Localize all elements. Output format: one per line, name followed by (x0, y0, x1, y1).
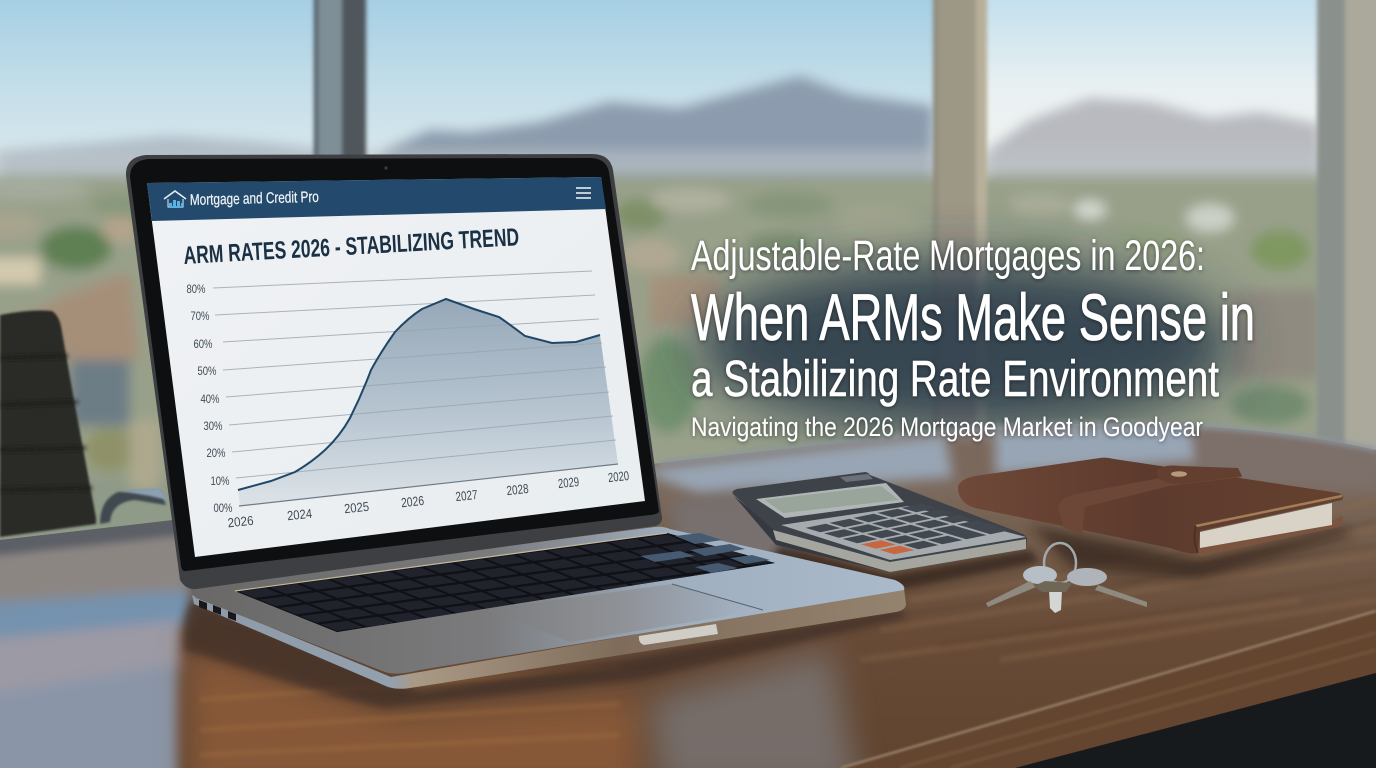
desk (0, 418, 1376, 768)
front latch (639, 624, 718, 645)
calculator shadow (770, 545, 1040, 592)
notebook shadow (1030, 525, 1350, 578)
x axis labels: 2027 (455, 487, 478, 504)
y axis labels: 30% (204, 421, 222, 433)
key heads (1023, 566, 1057, 584)
warm streaks right (862, 561, 1374, 662)
y axis labels: 60% (194, 339, 212, 351)
desk front edge (841, 611, 1376, 768)
x axis labels: 2026 (227, 513, 254, 530)
house keys (986, 543, 1147, 613)
x axis labels: 2029 (557, 474, 580, 491)
calculator (732, 472, 1027, 572)
y axis labels: 20% (206, 448, 226, 460)
house logo (164, 191, 186, 208)
laptop base (192, 527, 906, 689)
laptop lid (126, 154, 662, 589)
x axis labels (227, 468, 630, 530)
main title line 2: a Stabilizing Rate Environment (691, 350, 1219, 407)
soft back edge of desk (660, 424, 1376, 463)
warm wood under laptop (190, 650, 640, 768)
y axis labels: 70% (190, 311, 210, 323)
key blades (986, 581, 1036, 607)
shadow beneath desk (1015, 673, 1376, 768)
x axis labels: 2025 (343, 499, 370, 516)
x axis (239, 464, 618, 506)
grid lines (213, 271, 616, 478)
area chart (186, 271, 630, 530)
front cover (958, 458, 1343, 553)
x axis labels: 2020 (607, 468, 630, 485)
distant mountains (0, 76, 1376, 200)
key ring (1044, 543, 1076, 583)
sky (0, 0, 950, 200)
back sky reflection (640, 418, 1200, 495)
y axis labels: 00% (214, 503, 232, 515)
kicker line: Adjustable-Rate Mortgages in 2026: (691, 232, 1205, 280)
pages (1200, 503, 1332, 548)
wood grain and reflections (0, 418, 1376, 768)
calculator keys (806, 504, 1010, 554)
leather notebook (958, 458, 1343, 556)
laptop (126, 154, 906, 689)
brand name: Mortgage and Credit Pro (190, 189, 319, 209)
display (756, 483, 904, 518)
subtitle: Navigating the 2026 Mortgage Market in Goodyear (691, 412, 1203, 442)
x axis labels: 2026 (400, 493, 425, 510)
trend line (238, 299, 600, 490)
keyboard (235, 533, 775, 632)
left reflective bands (0, 518, 190, 768)
office chair (0, 310, 167, 537)
keypad plate (781, 506, 1026, 560)
y axis labels: 10% (210, 476, 230, 488)
window frames (314, 0, 1376, 455)
laptop reflection (184, 600, 906, 708)
site header bar (147, 177, 606, 221)
screen (147, 177, 645, 557)
strap and clasp (1058, 470, 1242, 534)
x axis labels: 2028 (506, 481, 529, 498)
y axis labels: 50% (198, 366, 216, 378)
y axis labels: 80% (186, 284, 206, 296)
menu icon (576, 188, 591, 198)
headline block (691, 232, 1255, 442)
webcam (384, 166, 388, 170)
trackpad (486, 584, 763, 642)
blurred neighbourhood (0, 176, 1376, 490)
y axis labels: 40% (200, 394, 220, 406)
back cover (1196, 516, 1343, 556)
x axis labels: 2024 (286, 506, 313, 523)
y axis labels (186, 284, 232, 515)
side ports (199, 600, 236, 621)
solar panel (840, 474, 873, 482)
chart title: ARM RATES 2026 - STABILIZING TREND (183, 223, 520, 270)
chart area fill (238, 299, 618, 506)
dark haze behind the heading (695, 260, 1235, 430)
